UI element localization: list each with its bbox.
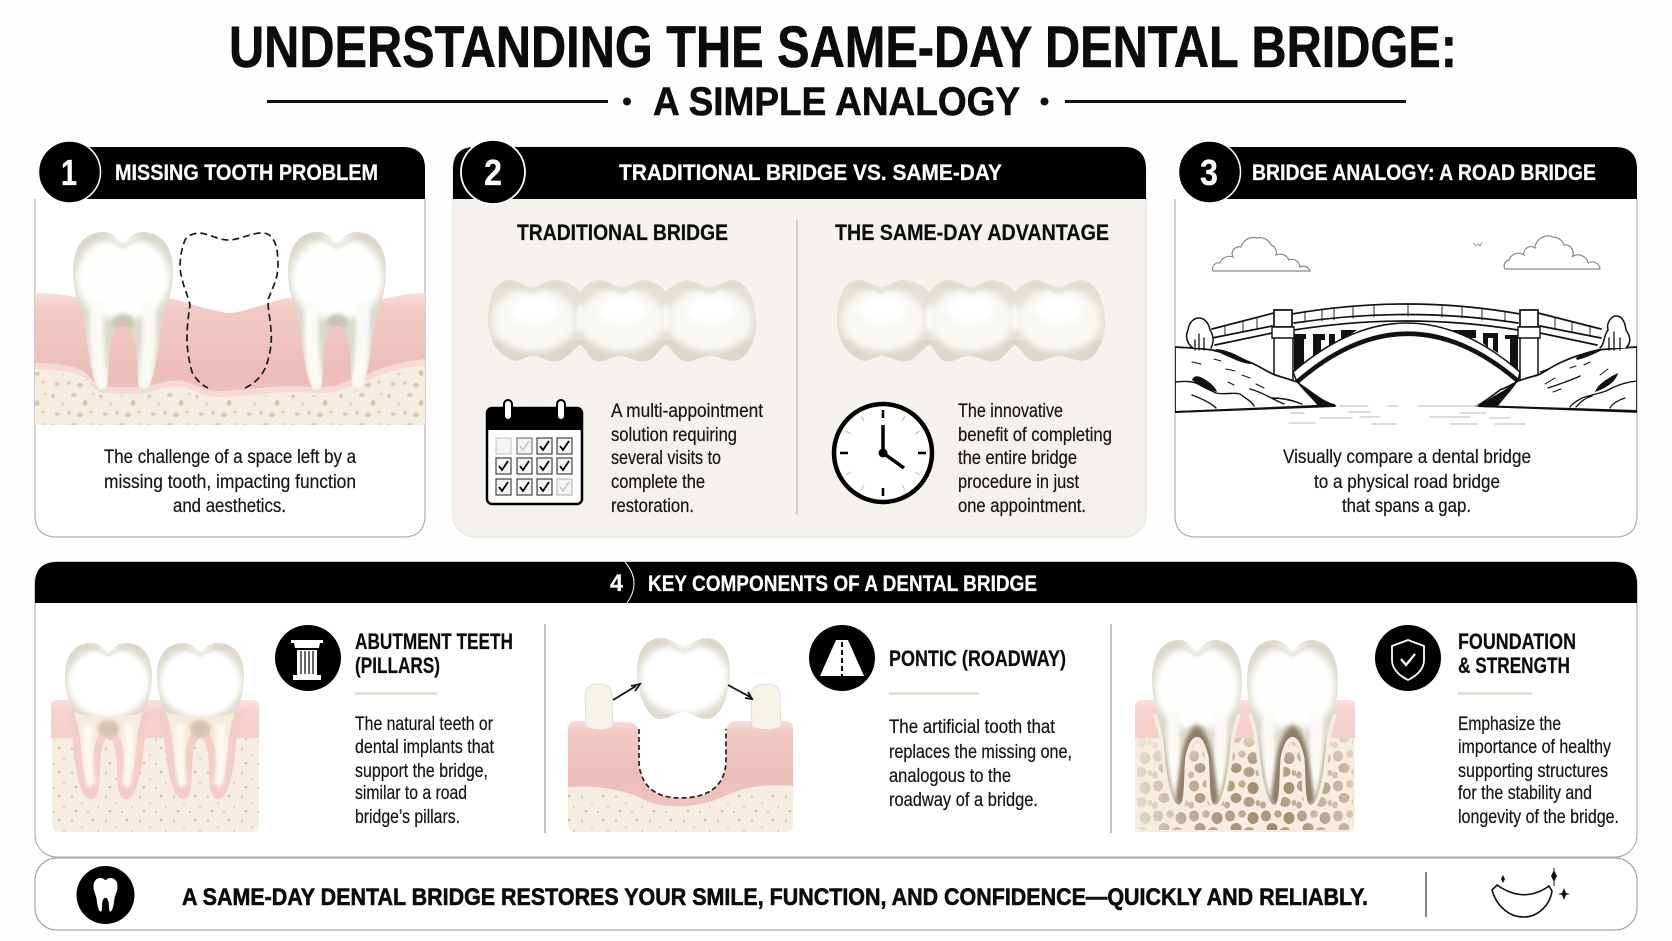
foundation description [1458,714,1619,828]
subtitle with rules: A SIMPLE ANALOGY [653,80,1020,124]
panel 1 description: and aesthetics. [173,496,286,517]
same-day description: procedure in just [958,472,1080,493]
panel: key components [35,562,1637,857]
arrows to abutments [613,684,752,700]
traditional description: restoration. [611,496,694,517]
icon: left cloud [1213,238,1310,271]
same-day description: the entire bridge [958,448,1077,469]
panel 4 heading: KEY COMPONENTS OF A DENTAL BRIDGE [648,571,1037,596]
number badge 3: 3 [1200,152,1218,193]
icon: bird [1473,242,1482,246]
panel 3 description: Visually compare a dental bridge [1283,447,1531,468]
panel 1 description: missing tooth, impacting function [104,472,356,493]
foundation heading [1458,629,1576,678]
left tree [1187,318,1213,348]
black rock masses [1297,381,1518,406]
left bank [1175,347,1335,412]
foundation heading: & STRENGTH [1458,653,1570,678]
panel 3 description [1283,447,1531,517]
hillside contours [1175,381,1302,408]
panel 1 header bar [70,147,425,199]
number badge 1: 1 [61,152,77,193]
foundation rule [1458,692,1532,695]
panel 3 header bar [1210,147,1637,199]
pontic description: analogous to the [889,766,1011,787]
arch [1293,323,1520,382]
floating pontic tooth [637,638,730,719]
number 4 with arc [610,562,634,603]
traditional description: complete the [611,472,705,493]
footer message: A SAME-DAY DENTAL BRIDGE RESTORES YOUR SMILE, FUNCTION, AND CONFIDENCE—QUICKLY AND RELIABLY. [182,884,1368,911]
number badge 2: 2 [484,152,502,193]
same-day description: one appointment. [958,496,1086,517]
water line [1175,406,1637,412]
abutment description: The natural teeth or [355,714,494,735]
illustration: road bridge [1175,304,1637,424]
icon: tooth in circle [76,866,134,924]
foundation description: longevity of the bridge. [1458,807,1619,828]
subtitle with rules [267,80,1406,124]
subheading: traditional bridge: TRADITIONAL BRIDGE [517,220,728,245]
dashed outline of missing tooth [180,233,278,388]
icon: calendar [486,400,583,504]
railing panel [1212,304,1601,329]
same-day description [958,401,1112,517]
illustration: gum and bone with missing tooth [35,227,425,425]
socket interior [639,722,726,798]
pontic rule [889,692,979,695]
same-day description: The innovative [958,401,1063,422]
pontic description: replaces the missing one, [889,742,1072,763]
footer banner [35,858,1637,930]
traditional description: several visits to [611,448,721,469]
panel: missing tooth problem [35,141,425,537]
foundation description: supporting structures [1458,761,1608,782]
number 4 with arc: 4 [610,570,624,597]
icon: road [809,625,875,691]
abutment description: similar to a road [355,783,467,804]
panel 1 heading: MISSING TOOTH PROBLEM [115,160,378,185]
foundation description: Emphasize the [1458,714,1561,735]
panel 4 header bar [35,562,1637,603]
panel: road bridge analogy [1175,141,1637,537]
icon: clock [834,404,932,502]
three-tooth bridge, same-day [835,280,1107,370]
panel 1 description [104,447,356,517]
foundation description: for the stability and [1458,783,1592,804]
abutment heading [355,629,513,678]
traditional description: A multi-appointment [611,401,764,422]
title: UNDERSTANDING THE SAME-DAY DENTAL BRIDGE: [229,15,1457,80]
panel 3 description: to a physical road bridge [1314,472,1500,493]
column divider [796,220,798,515]
abutment description: support the bridge, [355,761,488,782]
icon: right cloud [1504,236,1600,269]
pontic description [889,717,1072,811]
number badge 3 [1178,141,1240,203]
pontic heading: PONTIC (ROADWAY) [889,646,1066,671]
illustration: foundation teeth [1135,635,1355,832]
icon: shield [1375,625,1441,691]
left bushes [1192,349,1252,392]
same-day description: benefit of completing [958,425,1112,446]
panel: traditional bridge vs same-day [453,140,1146,537]
subheading: same-day advantage: THE SAME-DAY ADVANTAGE [835,220,1109,245]
three-tooth bridge, traditional [486,280,758,370]
panel 3 heading: BRIDGE ANALOGY: A ROAD BRIDGE [1252,160,1596,185]
abutment heading: ABUTMENT TEETH [355,629,513,654]
traditional description [611,401,764,517]
abutment description [355,714,495,828]
foundation heading: FOUNDATION [1458,629,1576,654]
illustration: pontic gap [568,638,793,832]
right bushes [1576,350,1618,392]
right tree [1600,316,1630,348]
foundation description: importance of healthy [1458,737,1611,758]
panel 3 description: that spans a gap. [1342,496,1471,517]
abutment description: dental implants that [355,737,495,758]
abutment rule [355,692,437,695]
right tooth [283,227,391,397]
icon: smile with sparkles [1492,868,1570,917]
left tooth [68,227,178,397]
towers [1274,310,1538,327]
illustration: abutment teeth [51,639,259,832]
icon: pillar [275,625,341,691]
panel 1 description: The challenge of a space left by a [104,447,356,468]
abutment description: bridge’s pillars. [355,807,460,828]
panel 2 heading: TRADITIONAL BRIDGE VS. SAME-DAY [619,160,1002,185]
panel 2 header bar [453,147,1146,199]
pontic description: roadway of a bridge. [889,790,1038,811]
number badge 2 [461,140,525,204]
abutment heading: (PILLARS) [355,653,440,678]
spandrel openings [1294,330,1518,375]
number badge 1 [38,141,100,203]
traditional description: solution requiring [611,425,737,446]
right bank [1477,347,1637,412]
pontic description: The artificial tooth that [889,717,1056,738]
